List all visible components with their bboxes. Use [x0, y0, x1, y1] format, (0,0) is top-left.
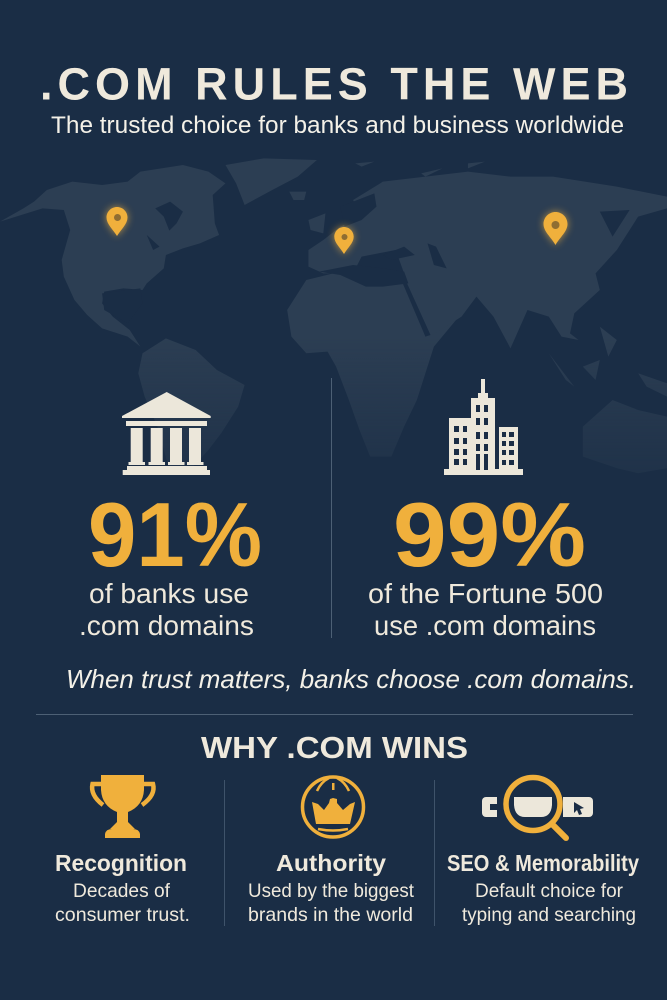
stat label: banks: of banks use	[89, 578, 249, 609]
description: authority: brands in the world	[248, 904, 413, 926]
description: seo and memorability	[462, 880, 636, 926]
icon: crown badge	[302, 777, 364, 837]
panel: banks	[79, 392, 262, 641]
description: seo and memorability: Default choice for	[475, 880, 623, 902]
stat: 91%: 91%	[88, 485, 262, 586]
section divider	[36, 714, 633, 715]
panel: authority	[248, 777, 415, 926]
panel: seo and memorability	[447, 775, 639, 926]
stat: 99%: 99%	[393, 485, 586, 586]
column dividers	[224, 780, 435, 926]
map pin: Asia	[544, 212, 568, 245]
icon: office buildings	[444, 379, 523, 475]
map pin: Europe	[334, 227, 354, 254]
world map	[2, 158, 667, 440]
description: authority: Used by the biggest	[248, 880, 415, 902]
label: seo and memorability: SEO & Memorability	[447, 850, 639, 876]
description: recognition: consumer trust.	[55, 904, 190, 926]
title: .COM RULES THE WEB	[40, 58, 628, 110]
heading: why .com wins: WHY .COM WINS	[201, 730, 468, 765]
stat label: fortune 500: of the Fortune 500	[368, 578, 603, 609]
description: seo and memorability: typing and searching	[462, 904, 636, 926]
label: authority: Authority	[276, 850, 386, 876]
description: recognition	[55, 880, 190, 926]
stat label: fortune 500	[368, 578, 603, 641]
icon: trophy	[92, 775, 154, 838]
icon: magnifier over search bar	[482, 775, 593, 838]
subtitle: The trusted choice for banks and business worldwide	[51, 112, 624, 139]
center divider	[331, 378, 332, 638]
stat label: banks	[79, 578, 254, 641]
panel: recognition	[55, 775, 190, 926]
map pin: North America	[106, 207, 128, 236]
panel: fortune 500	[368, 379, 603, 641]
icon: bank	[122, 392, 211, 475]
stat label: banks: .com domains	[79, 610, 254, 641]
tagline: When trust matters, banks choose .com domains.	[66, 664, 636, 694]
description: recognition: Decades of	[73, 880, 171, 902]
label: recognition: Recognition	[55, 850, 187, 876]
stat label: fortune 500: use .com domains	[374, 610, 596, 641]
description: authority	[248, 880, 415, 926]
